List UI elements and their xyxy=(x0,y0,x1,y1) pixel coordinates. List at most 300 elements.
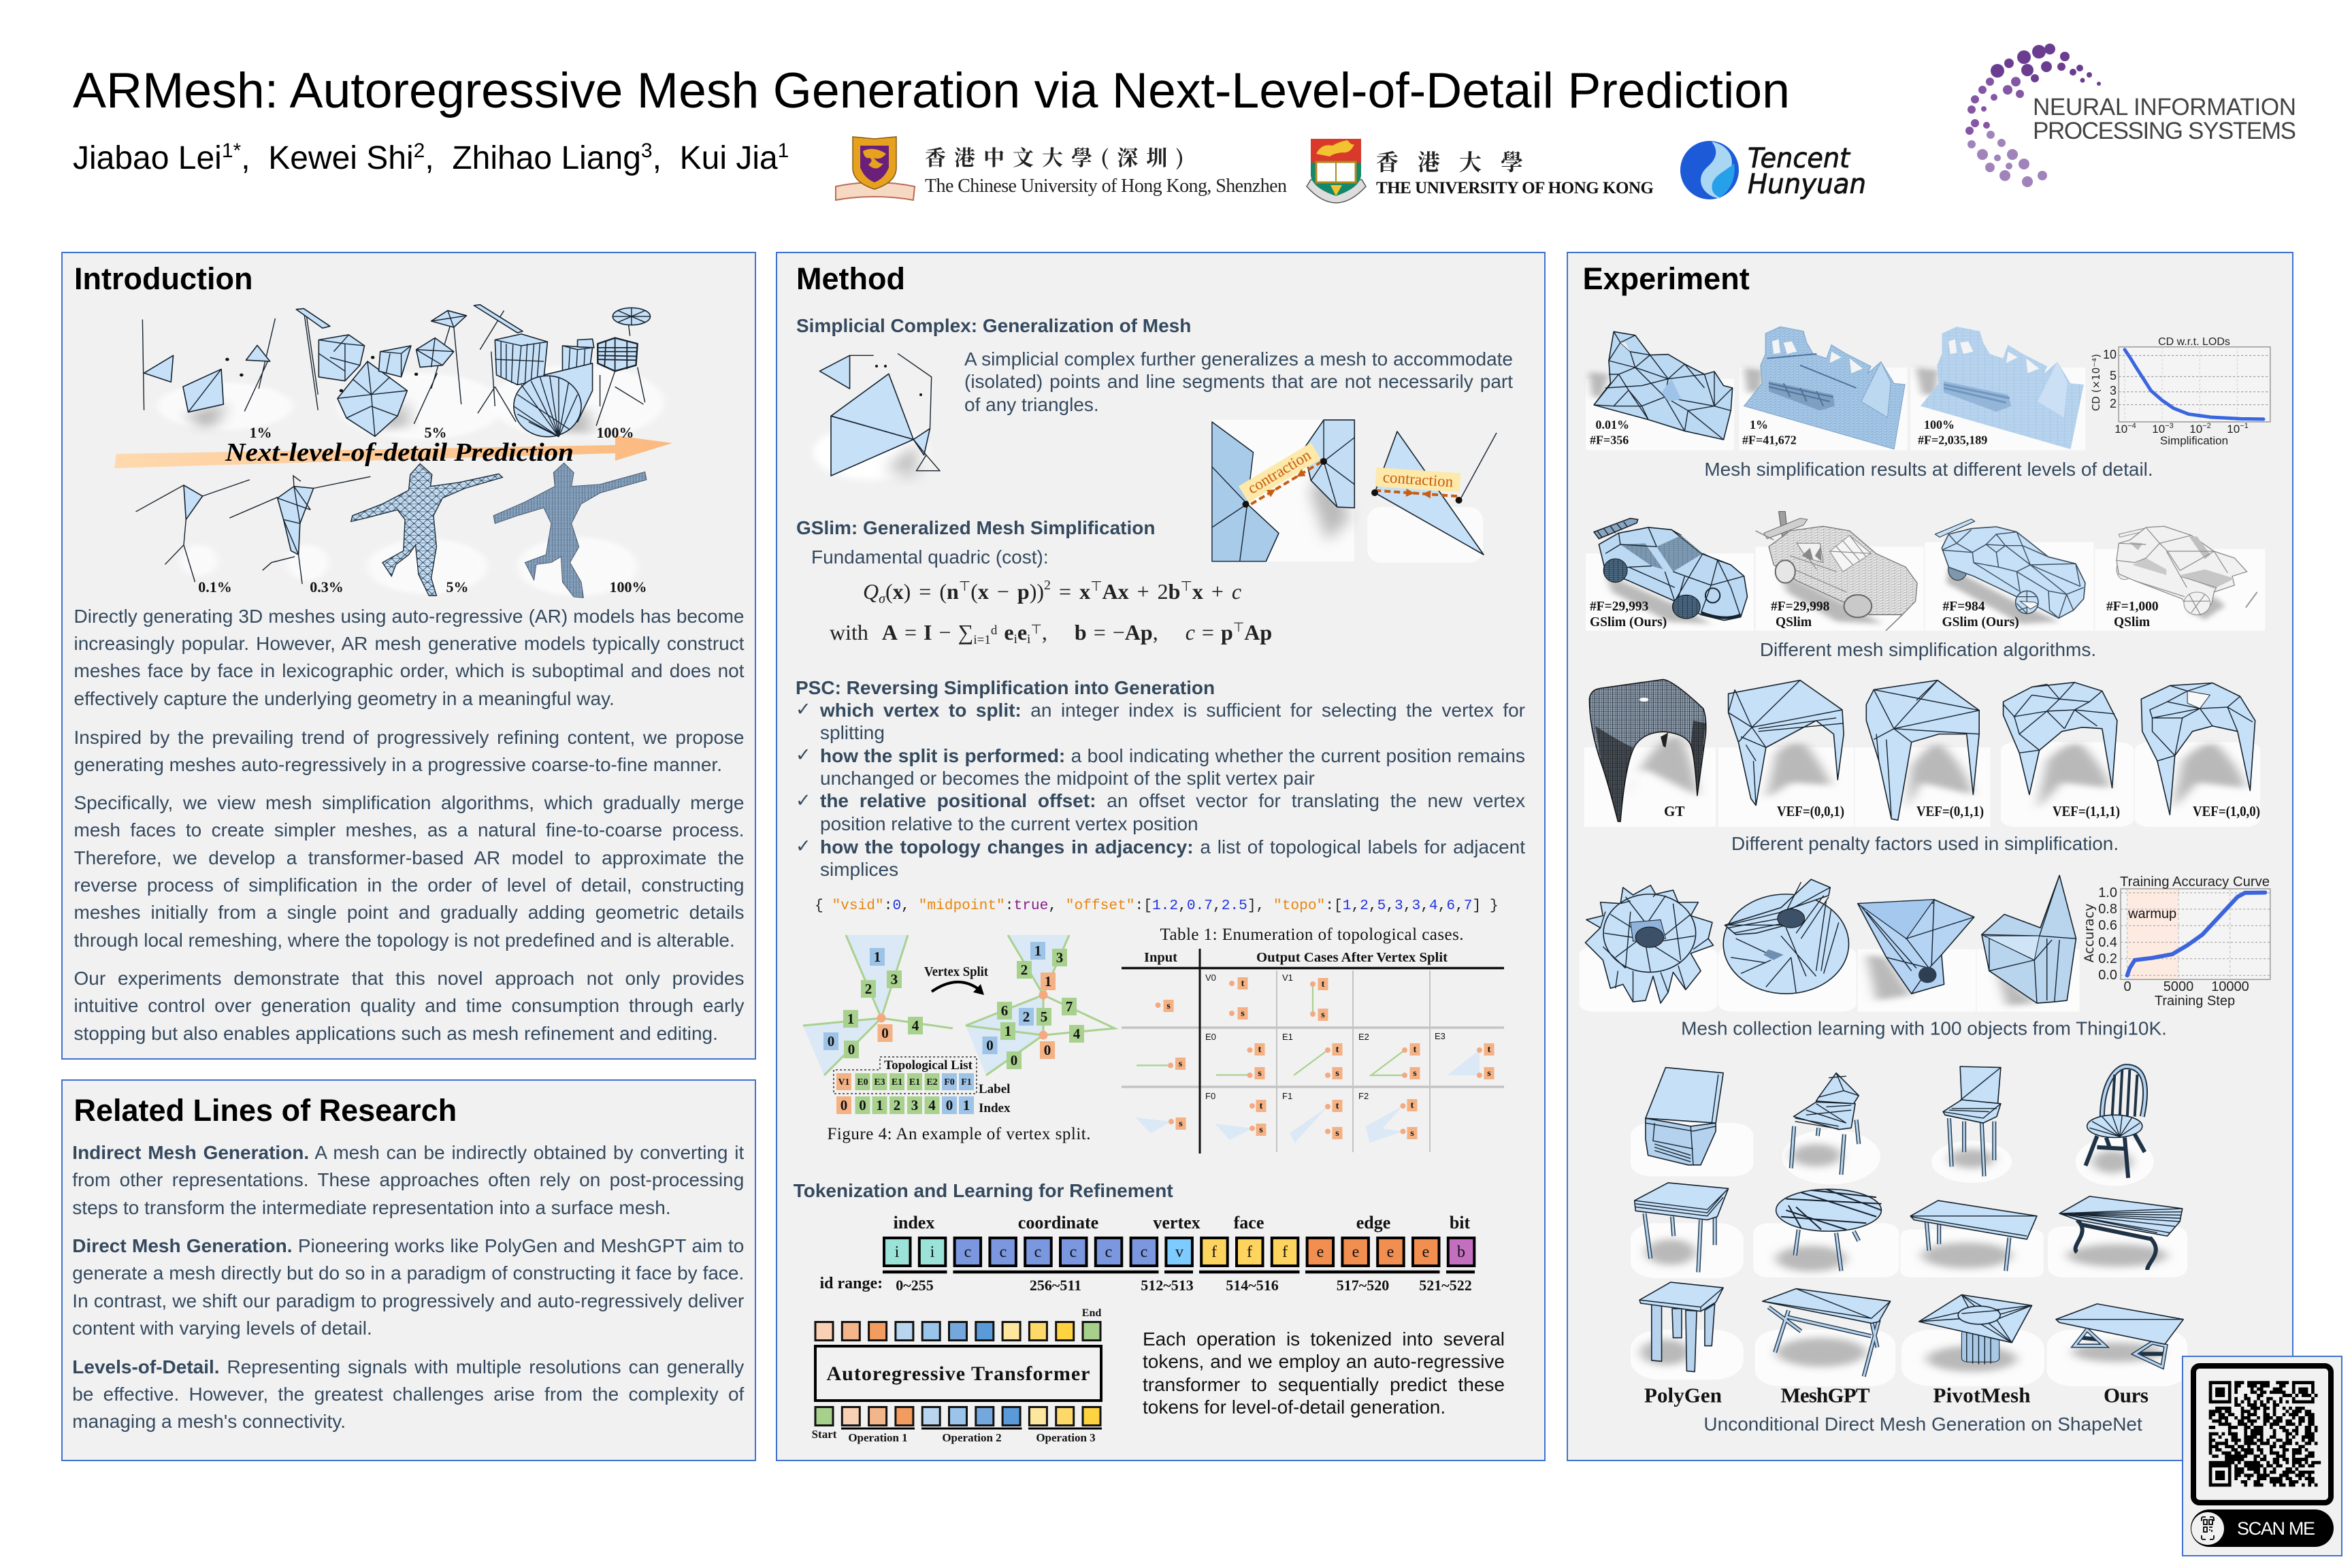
mesh 1% xyxy=(142,318,275,412)
formula: definitions: b = −Ap, c = p xyxy=(1075,620,1233,644)
figure: bulldozer levels of detail: 0.01% xyxy=(1595,418,1629,431)
logo: NeurIPS: PROCESSING SYSTEMS xyxy=(2033,118,2296,144)
diagram: token sequence: c xyxy=(964,1243,971,1261)
chart: training accuracy curve: Training Step xyxy=(2155,994,2235,1009)
figure: vertex split: 2 xyxy=(1023,1009,1030,1025)
chart: training accuracy curve: 0.0 xyxy=(2098,968,2117,983)
diagram: token sequence: c xyxy=(1070,1243,1077,1261)
diagram: token sequence: b xyxy=(1457,1243,1465,1261)
car qslim dense xyxy=(1756,512,1917,631)
figure: bulldozer levels of detail: #F=2,035,189 xyxy=(1918,434,1987,447)
chart: training accuracy curve xyxy=(2082,875,2270,1009)
diagram: autoregressive transformer: Autoregressive Transformer xyxy=(826,1362,1090,1385)
bullet: relative positional offset: the relative positional offset: an offset vector for translating the new vertex position relative to the current vertex position xyxy=(820,790,1525,834)
table: topological cases: E2 xyxy=(1358,1032,1369,1042)
gear 2 xyxy=(1723,879,1849,994)
figure: vertex split: 3 xyxy=(891,971,898,987)
figure: vertex split: F1 xyxy=(961,1077,972,1088)
diagram: token sequence: c xyxy=(1141,1243,1147,1261)
chart: training accuracy curve: 0.4 xyxy=(2098,935,2117,950)
diagram: token sequence: e xyxy=(1317,1243,1324,1261)
figure: vertex split: 1 xyxy=(1045,973,1051,990)
pivotmesh rect table xyxy=(1910,1200,2037,1271)
table: topological cases: E1 xyxy=(1282,1032,1293,1042)
title: ARMesh: Autoregressive Mesh Generation via Next-Level-of-Detail Prediction xyxy=(73,62,1790,118)
table: topological cases: E0 xyxy=(1205,1032,1216,1042)
table: topological cases: s xyxy=(1321,1010,1325,1020)
percentage labels: 100% xyxy=(596,424,634,441)
figure: thingi10k objects xyxy=(1580,875,2080,1012)
mesh 0.3% xyxy=(229,476,370,584)
logo: University of Hong Kong xyxy=(1307,139,1654,203)
figure: vertex split: 0 xyxy=(881,1025,889,1041)
table: topological cases: t xyxy=(1260,1101,1263,1111)
table: topological cases: s xyxy=(1166,1001,1171,1011)
authors: , Kewei Shi xyxy=(241,140,414,176)
diagram: token sequence: i xyxy=(895,1243,900,1261)
table headers xyxy=(1144,950,1448,965)
formula: quadric cost: x xyxy=(1192,579,1203,604)
meshgpt round table xyxy=(1776,1189,1881,1271)
percentage labels: 1% xyxy=(249,424,272,441)
figure: vertex split: E2 xyxy=(926,1077,938,1088)
formula: quadric cost: ⊤ xyxy=(1090,579,1102,594)
figure: vertex split: 2 xyxy=(1021,962,1028,978)
diagram: autoregressive transformer xyxy=(812,1307,1102,1444)
figure: vertex split: 1 xyxy=(1034,943,1041,959)
figure: bulldozer levels of detail xyxy=(1586,327,2085,451)
figure: bulldozer levels of detail: 100% xyxy=(1924,418,1955,431)
percentage labels: 100% xyxy=(610,578,647,595)
chart: CD w.r.t. LODs: 10 xyxy=(2227,423,2240,436)
chart: CD w.r.t. LODs: CD w.r.t. LODs xyxy=(2158,336,2230,348)
percentage labels: 5% xyxy=(446,578,468,595)
mesh human 100% xyxy=(493,463,647,598)
figure: vertex split: 2 xyxy=(894,1097,900,1113)
bulldozer 0.01% xyxy=(1594,331,1733,440)
chart: CD w.r.t. LODs: 10 xyxy=(2103,348,2117,361)
figure: vertex split: 1 xyxy=(1004,1023,1011,1039)
gear 1 xyxy=(1585,885,1713,1003)
figure: bulldozer levels of detail: #F=41,672 xyxy=(1742,434,1797,447)
polygen table row 3 xyxy=(1639,1282,1723,1372)
ours table row 3 xyxy=(2056,1304,2183,1367)
diagram: autoregressive transformer: Operation 2 xyxy=(942,1431,1002,1444)
figure: cars xyxy=(1586,512,2265,631)
percentage labels xyxy=(198,424,647,595)
heading: experiment: Experiment xyxy=(1583,261,1750,296)
table: topological cases: s xyxy=(1179,1119,1183,1129)
table: topological cases: s xyxy=(1241,1009,1245,1019)
diagram: token sequence: e xyxy=(1387,1243,1394,1261)
diagram: autoregressive transformer: End xyxy=(1082,1307,1101,1319)
figure: cars: QSlim xyxy=(1776,615,1812,630)
table VEF 100 xyxy=(2141,683,2255,815)
formula: definitions: Ap xyxy=(1244,620,1272,644)
figure: cars: GSlim (Ours) xyxy=(1590,615,1667,630)
diagram: token sequence: 256~511 xyxy=(1030,1277,1081,1294)
chart: training accuracy curve: 5000 xyxy=(2163,979,2193,994)
table: topological cases: t xyxy=(1258,1045,1262,1055)
figure: vertex split: E0 xyxy=(857,1077,868,1088)
text: indirect mesh generation: Indirect Mesh Generation. A mesh can be indirectly obtained by converting it from other representations. These approaches often rely on post-processing steps to transform the intermediate representation into a surface mesh. xyxy=(72,1142,744,1218)
table: topological cases: t xyxy=(1414,1045,1417,1055)
chart: CD w.r.t. LODs: 5 xyxy=(2110,369,2117,382)
figure: vertex split: 1 xyxy=(963,1097,970,1113)
figure: vertex split: 1 xyxy=(847,1011,854,1027)
formula: definitions: i xyxy=(1014,632,1017,647)
diagram: autoregressive transformer: Operation 1 xyxy=(848,1431,908,1444)
logo: Tencent Hunyuan: Hunyuan xyxy=(1748,169,1866,200)
ours curved table xyxy=(2059,1196,2183,1270)
heading: introduction: Introduction xyxy=(74,261,252,296)
figure: contraction right xyxy=(1367,431,1497,563)
figure: penalty factors: VEF=(1,0,0) xyxy=(2193,803,2260,819)
text: levels-of-detail: Levels-of-Detail. Representing signals with multiple resolutions can generally be effective. However, the greatest challenges arise from the complexity of managing a mesh's connectivity. xyxy=(72,1356,744,1432)
subheading: tokenization: Tokenization and Learning for Refinement xyxy=(794,1180,1173,1201)
chart: CD w.r.t. LODs: CD (×10⁻⁴) xyxy=(2090,354,2102,411)
car gslim dense xyxy=(1594,519,1748,621)
chart: CD w.r.t. LODs: −4 xyxy=(2127,422,2136,430)
heading: related lines of research: Related Lines of Research xyxy=(74,1093,457,1128)
check marks: ✓ xyxy=(796,745,811,766)
bulldozer 1% xyxy=(1744,327,1905,449)
text: fundamental quadric: Fundamental quadric (cost): xyxy=(811,546,1049,568)
formula: quadric cost: 2 xyxy=(1044,578,1051,593)
diagram: token sequence xyxy=(819,1213,1475,1294)
figure: penalty factors xyxy=(1584,679,2260,827)
object spire xyxy=(1982,875,2076,1003)
figure: shapenet generation comparison: PolyGen xyxy=(1644,1384,1722,1407)
figure: vertex split: 0 xyxy=(946,1097,953,1113)
caption: simplification: Mesh simplification results at different levels of detail. xyxy=(1704,459,2153,480)
formula: quadric cost: x − p)) xyxy=(978,579,1044,604)
table: topological cases: V0 xyxy=(1205,973,1216,983)
figure: vertex split: Topological List xyxy=(884,1058,973,1073)
chart: training accuracy curve: 0.8 xyxy=(2098,902,2117,917)
authors: 3 xyxy=(641,140,653,162)
diagram: token sequence: 514~516 xyxy=(1226,1277,1279,1294)
caption: algorithms: Different mesh simplification algorithms. xyxy=(1760,639,2096,660)
diagram: token sequence: e xyxy=(1422,1243,1429,1261)
table: topological cases: t xyxy=(1411,1100,1414,1111)
QR frame xyxy=(2193,1366,2331,1503)
diagram: token sequence: bit xyxy=(1450,1213,1471,1232)
formula: definitions: , xyxy=(1042,620,1075,644)
bulldozer 100% xyxy=(1921,327,2084,449)
figure: contraction right: contraction xyxy=(1382,468,1454,491)
figure: shapenet generation comparison: MeshGPT xyxy=(1780,1384,1870,1407)
logo: University of Hong Kong: 香港大學 xyxy=(1376,145,1542,177)
chart: training accuracy curve: 1.0 xyxy=(2098,885,2117,900)
diagram: token sequence: 521~522 xyxy=(1419,1277,1472,1294)
figure: vertex split: Label xyxy=(979,1082,1010,1096)
authors: 2 xyxy=(414,140,425,162)
subheading: gslim: GSlim: Generalized Mesh Simplification xyxy=(796,517,1155,538)
formula: definitions: i xyxy=(1027,632,1030,647)
caption: penalty factors: Different penalty factors used in simplification. xyxy=(1731,833,2119,854)
caption: thingi10k: Mesh collection learning with 100 objects from Thingi10K. xyxy=(1681,1018,2167,1039)
text: tokenization description: Each operation is tokenized into several tokens, and we employ an auto-regressive transformer to sequentially predict these tokens for level-of-detail generation. xyxy=(1143,1328,1505,1418)
bullet: topology changes in adjacency: how the topology changes in adjacency: a list of topological labels for adjacent simplices xyxy=(820,836,1525,880)
car qslim coarse xyxy=(2117,526,2257,615)
QR code xyxy=(2209,1383,2321,1485)
bullet: which vertex to split: which vertex to split: an integer index is sufficient for selecting the vertex for splitting xyxy=(820,700,1525,743)
formula: quadric cost: ( xyxy=(885,579,893,604)
subheading: psc: PSC: Reversing Simplification into Generation xyxy=(796,677,1215,698)
chart: CD w.r.t. LODs: 2 xyxy=(2110,397,2117,410)
text: introduction paragraph 3: Specifically, we view mesh simplification algorithms, which gradually merge mesh faces to create simpler meshes, as a natural fine-to-coarse process. Therefore, we develop a transformer-based AR model to approximate the reverse process of simplification in the order of level of detail, constructing meshes initially from a single point and gradually adding geometric details through local remeshing, where the topology is not predefined and is alterable. xyxy=(74,792,745,951)
panel: related lines of research xyxy=(61,1079,756,1461)
logo: Tencent Hunyuan: Tencent xyxy=(1748,143,1850,174)
heading: method: Method xyxy=(796,261,905,296)
table: topological cases: s xyxy=(1179,1059,1183,1069)
table: topological cases: t xyxy=(1322,979,1325,990)
chart: CD w.r.t. LODs: 10 xyxy=(2189,423,2202,436)
diagram: token sequence: 512~513 xyxy=(1141,1277,1194,1294)
chart: training accuracy curve: 10000 xyxy=(2211,979,2249,994)
table: topological cases: s xyxy=(1259,1125,1263,1135)
diagram: token sequence: v xyxy=(1175,1243,1183,1261)
table: topological cases: s xyxy=(1335,1128,1339,1139)
meshgpt table row 3 xyxy=(1763,1289,1891,1377)
logo: CUHK Shenzhen: The Chinese University of Hong Kong, Shenzhen xyxy=(925,176,1287,197)
authors: , Kui Jia xyxy=(653,140,778,176)
figure: bulldozer levels of detail: 1% xyxy=(1750,418,1768,431)
figure: contraction left: contraction xyxy=(1245,446,1314,497)
table: topological cases: F1 xyxy=(1282,1091,1292,1101)
table: topological cases: s xyxy=(1413,1068,1417,1079)
formula: quadric cost: + c xyxy=(1211,579,1241,604)
figure: vertex split xyxy=(803,935,1115,1115)
logo: NeurIPS: NEURAL INFORMATION xyxy=(2033,94,2296,120)
figure: penalty factors: VEF=(1,1,1) xyxy=(2053,803,2120,819)
arrow xyxy=(114,436,672,468)
figure: vertex split: F0 xyxy=(944,1077,955,1088)
arrow label: Next-level-of-detail Prediction xyxy=(225,438,574,467)
diagram: token sequence: face xyxy=(1234,1213,1264,1232)
figure: vertex split: 0 xyxy=(859,1097,866,1113)
formula: quadric cost: x xyxy=(1079,579,1090,604)
formula: definitions: ⊤ xyxy=(1030,623,1042,637)
table headers: Output Cases After Vertex Split xyxy=(1256,950,1448,965)
formula: definitions: i=1 xyxy=(973,633,991,647)
diagram: token sequence: 517~520 xyxy=(1337,1277,1389,1294)
polygen chair xyxy=(1646,1068,1723,1165)
figure: vertex split: 7 xyxy=(1066,998,1073,1015)
figure: vertex split: Index xyxy=(979,1101,1011,1115)
check marks: ✓ xyxy=(796,836,811,857)
formula: quadric cost: σ xyxy=(879,591,886,606)
mesh 0.1% xyxy=(135,480,250,582)
chart: CD w.r.t. LODs: Simplification xyxy=(2160,434,2228,447)
table: topological cases: V1 xyxy=(1282,973,1293,983)
figure: cars: #F=984 xyxy=(1942,600,1985,614)
chart: training accuracy curve: Training Accuracy Curve xyxy=(2120,875,2270,889)
mesh 100% xyxy=(474,305,650,437)
chart: training accuracy curve: Accuracy xyxy=(2082,904,2097,962)
chart: CD w.r.t. LODs xyxy=(2090,336,2270,447)
formula: quadric cost: Ax xyxy=(1102,579,1129,604)
table VEF 011 xyxy=(1866,681,1979,820)
figure: vertex split: E3 xyxy=(874,1077,885,1088)
figure: vertex split: 3 xyxy=(1056,949,1063,966)
chart: training accuracy curve: warmup xyxy=(2127,906,2176,921)
table: topological cases: E3 xyxy=(1435,1031,1446,1041)
car gslim coarse xyxy=(1935,519,2085,618)
authors: 1* xyxy=(222,140,242,162)
panel: QR code xyxy=(2182,1356,2342,1556)
formula: definitions: d xyxy=(991,623,998,638)
diagram: token sequence: c xyxy=(1000,1243,1007,1261)
percentage labels: 5% xyxy=(425,424,446,441)
table caption: Table 1: Enumeration of topological cases. xyxy=(1160,926,1463,944)
logo: NeurIPS xyxy=(1965,44,2296,187)
table: topological cases: t xyxy=(1336,1101,1339,1111)
formula: quadric cost: + 2b xyxy=(1137,579,1180,604)
figure: vertex split: 0 xyxy=(1011,1052,1017,1068)
figure: vertex split: 0 xyxy=(1044,1042,1051,1058)
logo: CUHK Shenzhen: 香港中文大學(深圳) xyxy=(925,141,1192,172)
table: topological cases: s xyxy=(1410,1128,1414,1139)
formula: quadric cost: ⊤ xyxy=(1180,579,1192,594)
caption: figure 4: Figure 4: An example of vertex split. xyxy=(828,1125,1090,1143)
figure: vertex split: 2 xyxy=(865,981,872,997)
chart: CD w.r.t. LODs: −2 xyxy=(2202,422,2211,430)
formula: definitions: ⊤ xyxy=(1233,621,1244,635)
chart: training accuracy curve: 0.6 xyxy=(2098,918,2117,933)
figure: vertex split: E1 xyxy=(892,1077,902,1088)
figure: vertex split: 0 xyxy=(828,1033,834,1049)
chart: training accuracy curve: 0.2 xyxy=(2098,951,2117,966)
diagram: token sequence: id range: xyxy=(819,1275,883,1292)
table headers: Input xyxy=(1144,950,1177,965)
figure: vertex split: 3 xyxy=(911,1097,918,1113)
figure: shapenet generation comparison xyxy=(1631,1066,2187,1407)
diagram: token sequence: f xyxy=(1282,1243,1288,1261)
formula: quadric cost: x) = (n xyxy=(893,579,959,604)
diagram: token sequence: e xyxy=(1352,1243,1359,1261)
figure: vertex split: 5 xyxy=(1041,1009,1047,1025)
percentage labels: 0.1% xyxy=(198,578,232,595)
formula: quadric cost: = xyxy=(1051,579,1079,604)
panel: introduction xyxy=(61,252,756,1060)
formula: definitions: with A = I − ∑ xyxy=(830,620,973,644)
table GT xyxy=(1589,679,1706,821)
caption: shapenet: Unconditional Direct Mesh Generation on ShapeNet xyxy=(1703,1414,2142,1435)
mesh human 5% xyxy=(351,463,502,595)
diagram: token sequence: c xyxy=(1034,1243,1041,1261)
logo: CUHK Shenzhen xyxy=(836,137,1287,200)
panel: method xyxy=(776,252,1546,1461)
chart: CD w.r.t. LODs: 10 xyxy=(2114,423,2127,436)
figure: shapenet generation comparison: PivotMesh xyxy=(1933,1384,2031,1407)
polygen table row 2 xyxy=(1635,1183,1729,1272)
check marks xyxy=(796,699,811,857)
percentage labels: 0.3% xyxy=(310,578,344,595)
table VEF 111 xyxy=(2004,683,2117,795)
figure: next-level-of-detail prediction xyxy=(114,305,672,598)
figure: bulldozer levels of detail: #F=356 xyxy=(1590,434,1629,447)
authors: , Zhihao Liang xyxy=(425,140,641,176)
text: introduction paragraph 4: Our experiments demonstrate that this novel approach not only provides intuitive control over generation quality and time consumption through early stopping but also enables applications such as mesh refinement and editing. xyxy=(74,968,745,1044)
figure: vertex split: 4 xyxy=(1073,1026,1081,1042)
figure: vertex split: 4 xyxy=(912,1017,919,1034)
figure: penalty factors: GT xyxy=(1664,803,1684,819)
figure: vertex split: 0 xyxy=(840,1097,847,1113)
diagram: token sequence: c xyxy=(1105,1243,1112,1261)
figure: vertex split: 1 xyxy=(876,1097,883,1113)
table: topological cases: F0 xyxy=(1205,1091,1215,1101)
chart: CD w.r.t. LODs: 3 xyxy=(2110,384,2117,397)
figure: cars: #F=29,993 xyxy=(1590,600,1649,614)
table: topological cases: F2 xyxy=(1358,1091,1369,1101)
logo: University of Hong Kong: THE UNIVERSITY OF HONG KONG xyxy=(1376,179,1654,197)
panel: experiment xyxy=(1567,252,2293,1461)
text: simplicial complex description: A simplicial complex further generalizes a mesh to accommodate (isolated) points and line segments that are not necessarily part of any triangles. xyxy=(964,348,1513,415)
diagram: autoregressive transformer: Start xyxy=(812,1428,837,1441)
text: introduction paragraph 1: Directly generating 3D meshes using auto-regressive (AR) models has become increasingly popular. However, AR mesh generative models typically construct meshes face by face in lexicographic order, which is suboptimal and does not effectively capture the underlying geometry in a meaningful way. xyxy=(74,606,745,709)
figure: cars: GSlim (Ours) xyxy=(1942,615,2019,630)
header xyxy=(73,44,2296,203)
figure: vertex split: 4 xyxy=(928,1097,936,1113)
table: topological cases: t xyxy=(1336,1045,1339,1055)
figure: vertex split: 0 xyxy=(848,1041,855,1058)
formula: definitions: e xyxy=(1017,620,1027,644)
figure: vertex split: V1 xyxy=(838,1077,850,1088)
table: topological cases: s xyxy=(1487,1068,1491,1079)
figure: penalty factors: VEF=(0,0,1) xyxy=(1777,803,1844,819)
diagram: token sequence: f xyxy=(1247,1243,1252,1261)
figure: vertex split: 1 xyxy=(874,949,881,965)
code: operation example: { "vsid":0, "midpoint":true, "offset":[1.2,0.7,2.5], "topo":[1,2,5,3,3,4,6,7] } xyxy=(815,898,1499,914)
logo: Tencent Hunyuan xyxy=(1680,141,1866,200)
authors: Jiabao Lei xyxy=(73,140,222,176)
diagram: token sequence: 0~255 xyxy=(896,1277,934,1294)
table: topological cases: t xyxy=(1241,979,1245,989)
diagram: token sequence: vertex xyxy=(1153,1213,1200,1232)
diagram: token sequence: i xyxy=(930,1243,935,1261)
pivotmesh chair xyxy=(1943,1066,2001,1176)
pivotmesh star table xyxy=(1919,1295,2032,1365)
diagram: token sequence: f xyxy=(1211,1243,1217,1261)
chart: CD w.r.t. LODs: −1 xyxy=(2240,422,2249,430)
figure: vertex split: 6 xyxy=(1001,1002,1008,1019)
figure: cars: #F=1,000 xyxy=(2106,600,2159,614)
table VEF 001 xyxy=(1729,681,1844,805)
figure: contraction left xyxy=(1212,420,1354,561)
scan me button: SCAN ME xyxy=(2237,1518,2315,1539)
figure: cars: QSlim xyxy=(2114,615,2150,630)
bullet: how the split is performed: how the split is performed: a bool indicating whether the current position remains unchanged or becomes the midpoint of the split vertex pair xyxy=(820,745,1525,789)
diagram: token sequence: index xyxy=(894,1213,934,1232)
scan me button xyxy=(2191,1509,2334,1547)
authors: 1 xyxy=(778,140,789,162)
figure: vertex split: 0 xyxy=(986,1037,994,1054)
diagram: autoregressive transformer: Operation 3 xyxy=(1036,1431,1096,1444)
formula: quadric cost: ( xyxy=(970,579,978,604)
formula: quadric cost: Q xyxy=(863,579,879,604)
chart: CD w.r.t. LODs: 10 xyxy=(2152,423,2165,436)
figure: cars: #F=29,998 xyxy=(1771,600,1830,614)
figure: simplicial complex xyxy=(813,353,940,480)
check marks: ✓ xyxy=(796,790,811,811)
figure: vertex split: E1 xyxy=(909,1077,920,1088)
ours chair xyxy=(2085,1066,2145,1178)
text: direct mesh generation: Direct Mesh Generation. Pioneering works like PolyGen and MeshGPT aim to generate a mesh directly but do so in a paradigm of constructing it face by face. In contrast, we shift our paradigm to progressively and auto-regressively deliver content with varying levels of detail. xyxy=(72,1235,744,1339)
subheading: simplicial complex: Simplicial Complex: Generalization of Mesh xyxy=(796,315,1191,336)
formula: definitions: e xyxy=(1004,620,1014,644)
